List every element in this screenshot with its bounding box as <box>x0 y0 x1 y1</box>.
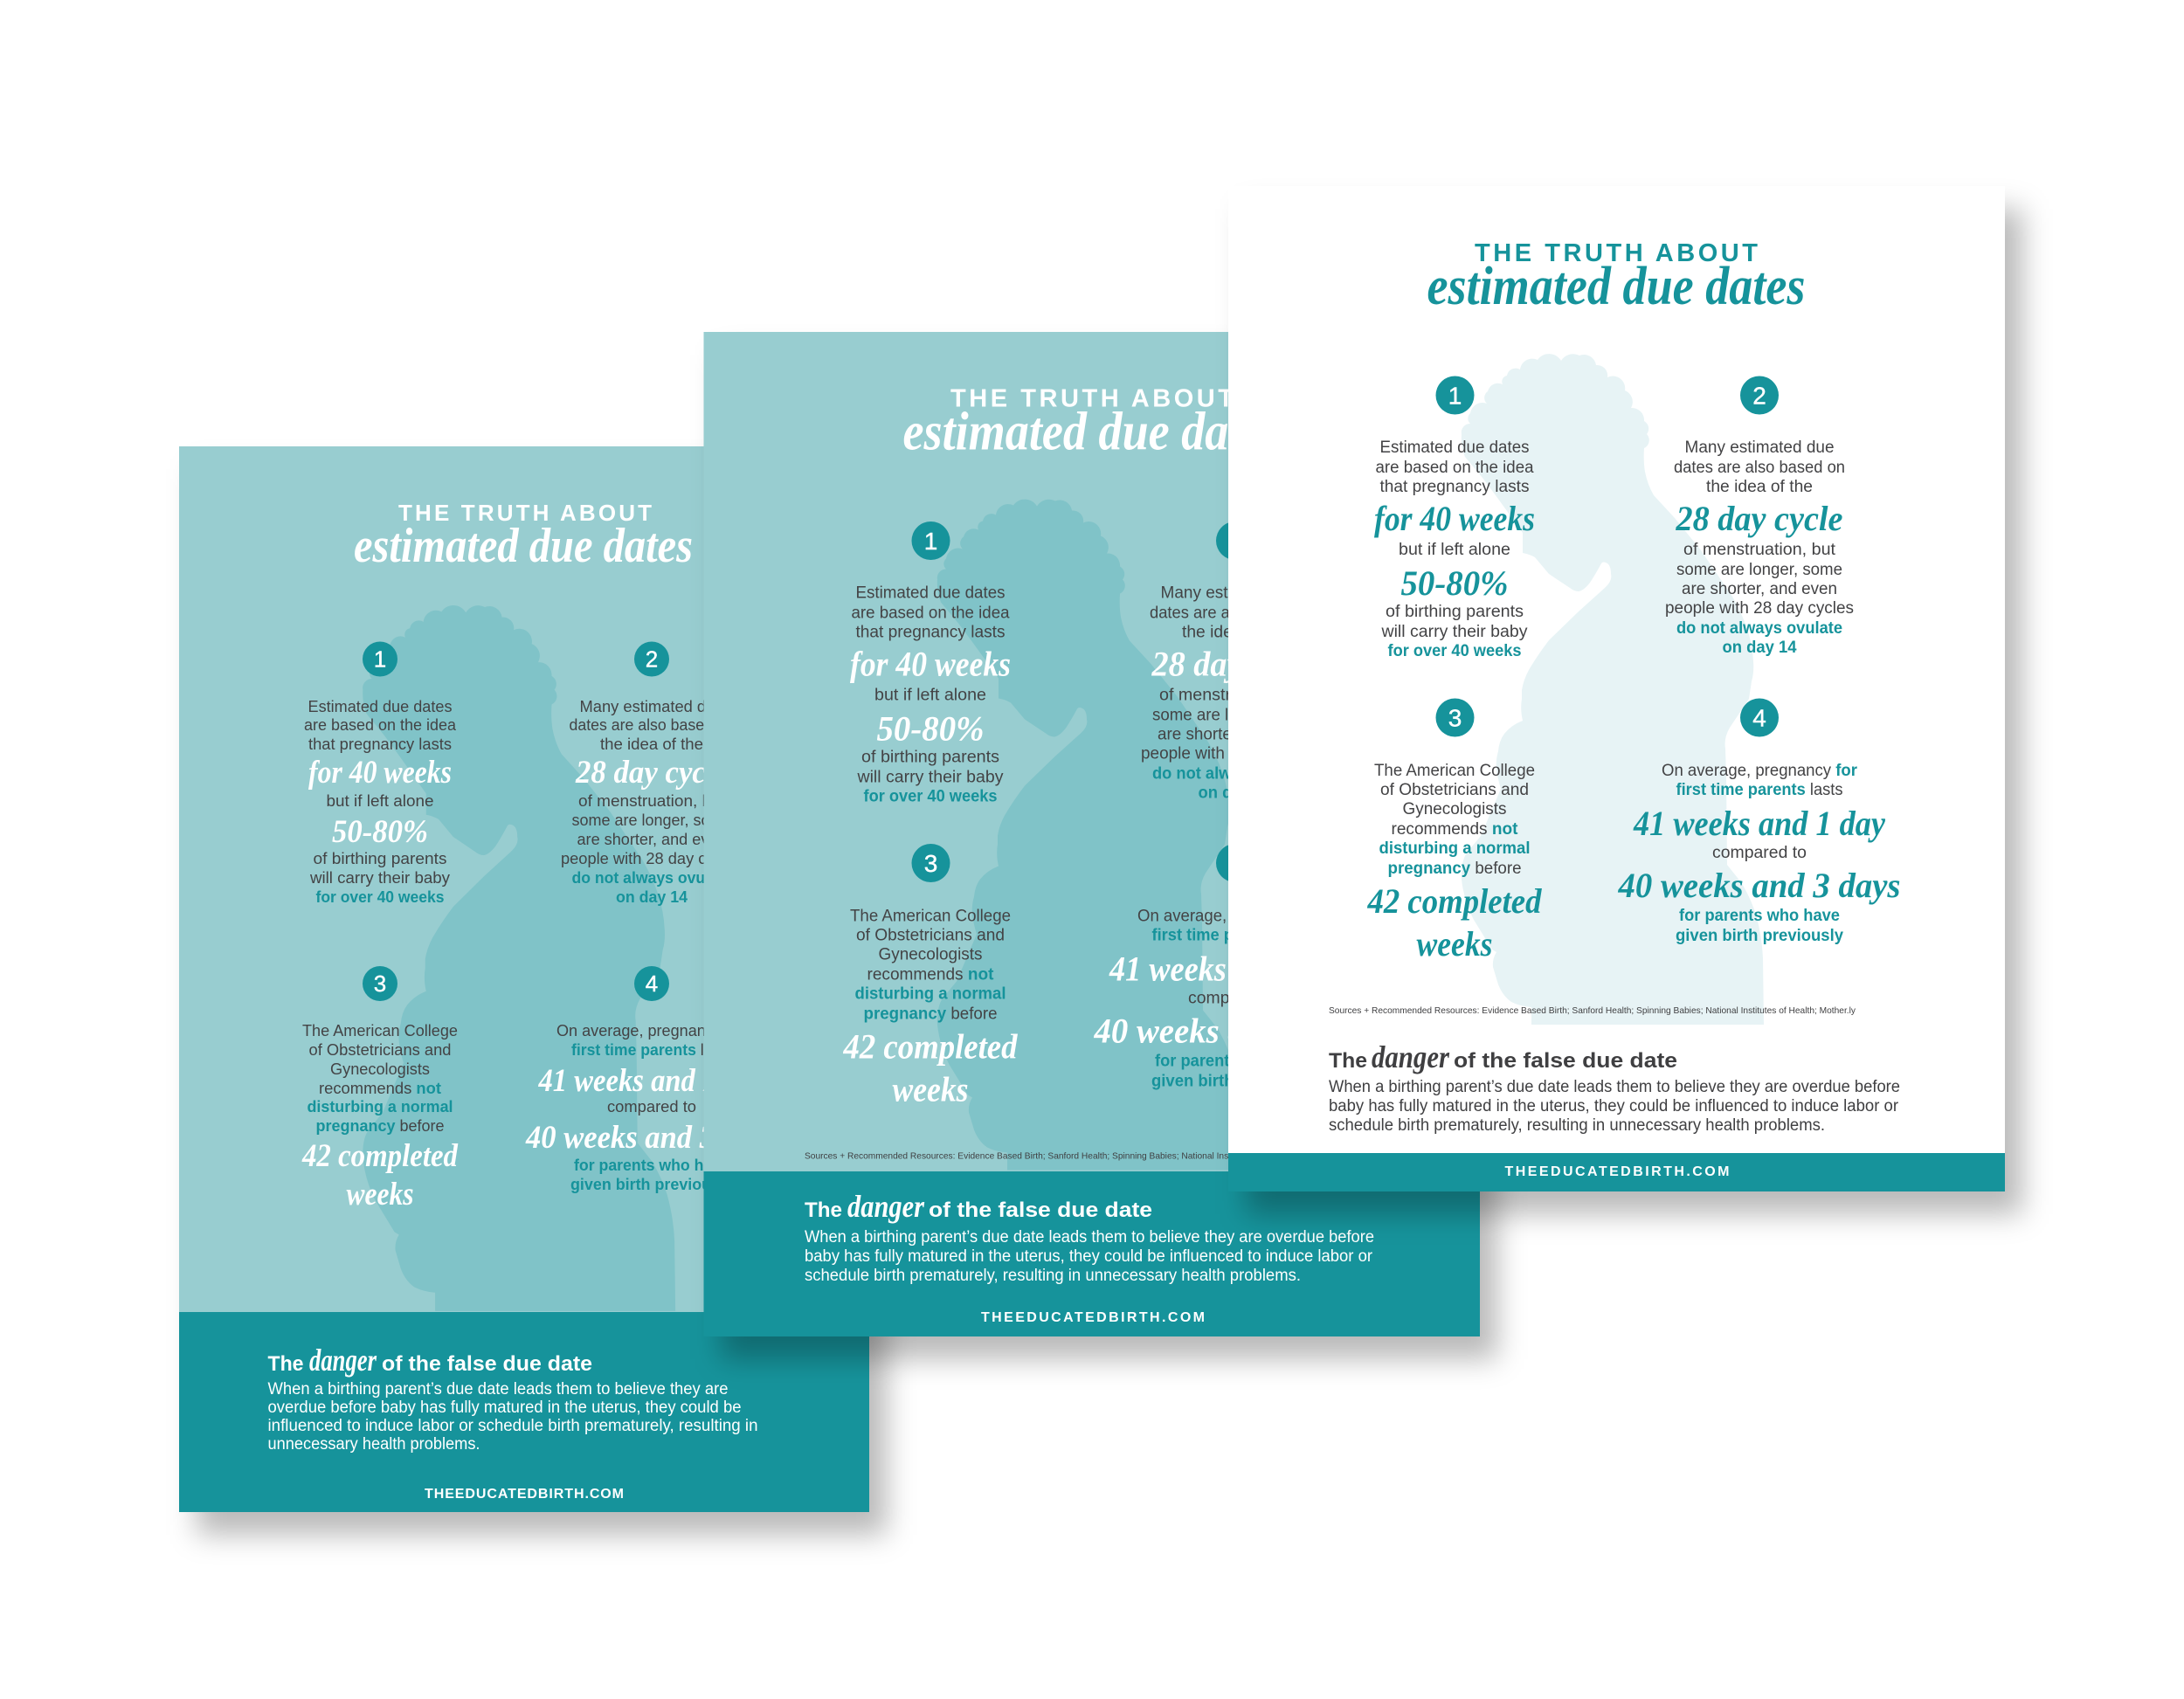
footer text, card 2: danger <box>847 1189 925 1224</box>
step 1, card 1: Estimated due dates <box>308 698 453 715</box>
footer text, card 1: influenced to induce labor or schedule birth prematurely, resulting in <box>267 1417 758 1435</box>
step 2, card 1: 2 <box>646 646 658 673</box>
step 1, card 1 <box>304 641 457 906</box>
step 3, card 3: The American College <box>1374 762 1535 780</box>
step 3, card 1: recommends not <box>319 1080 441 1097</box>
step 2, card 1: the idea of the <box>600 736 703 753</box>
step 3, card 2 <box>843 844 1018 1109</box>
step 2, card 1: of menstruation, but <box>578 792 725 810</box>
footer text, card 1: of the false due date <box>382 1352 592 1376</box>
step 3, card 2: recommends not <box>867 966 994 984</box>
step 2, card 2: people with 28 day cycles <box>1141 744 1330 763</box>
footer text, card 1: overdue before baby has fully matured in the uterus, they could be <box>267 1399 741 1417</box>
step 4, card 1: first time parents lasts <box>571 1041 732 1059</box>
step 3, card 2: disturbing a normal <box>854 985 1006 1003</box>
step 2, card 3: 28 day cycle <box>1676 499 1843 538</box>
step 4, card 1: given birth previously <box>570 1176 733 1193</box>
step 1, card 1: are based on the idea <box>304 716 457 734</box>
step 3, card 1: weeks <box>346 1177 414 1212</box>
step 1, card 1: that pregnancy lasts <box>308 736 452 753</box>
step 2, card 3: dates are also based on <box>1674 459 1845 477</box>
footer text, card 1: The <box>267 1352 304 1376</box>
footer text, card 1: When a birthing parent’s due date leads them to believe they are <box>267 1380 729 1399</box>
step 2, card 2: dates are also based on <box>1150 604 1321 622</box>
footer text, card 2: When a birthing parent’s due date leads them to believe they are overdue before <box>805 1228 1374 1247</box>
step 3, card 2: Gynecologists <box>879 945 982 964</box>
step 4, card 2: compared to <box>1188 989 1282 1008</box>
step 4, card 1 <box>525 966 778 1193</box>
step 1, card 2: 1 <box>924 528 937 555</box>
sources line, card 2: Sources + Recommended Resources: Evidence Based Birth; Sanford Health; Spinning Babies; National Institutes of Health; Mother.ly <box>805 1151 1332 1162</box>
step 1, card 3: but if left alone <box>1399 541 1510 559</box>
step 3, card 1: The American College <box>302 1022 458 1039</box>
footer band, card 2 <box>704 1171 1480 1336</box>
footer text, card 1: THEEDUCATEDBIRTH.COM <box>425 1487 624 1502</box>
heading, card 3: THE TRUTH ABOUT <box>1475 239 1758 267</box>
step 3, card 3: recommends not <box>1391 820 1518 839</box>
step 1, card 2: are based on the idea <box>851 604 1010 622</box>
step 2, card 2: the idea of the <box>1182 624 1289 641</box>
step 3, card 3: disturbing a normal <box>1379 839 1531 858</box>
step 2, card 1: dates are also based on <box>570 716 734 734</box>
step 3, card 3 <box>1367 699 1542 963</box>
footer band, card 3 <box>1228 1153 2005 1191</box>
step 1, card 2: that pregnancy lasts <box>856 624 1005 641</box>
step 4, card 3: 41 weeks and 1 day <box>1633 804 1885 843</box>
footer text, card 1: unnecessary health problems. <box>267 1435 480 1454</box>
step 4, card 2: 4 <box>1228 850 1242 877</box>
heading, card 1: estimated due dates <box>354 519 693 573</box>
step 3, card 2: pregnancy before <box>863 1005 998 1024</box>
step 1, card 2: will carry their baby <box>856 769 1004 786</box>
step 4, card 1: 40 weeks and 3 days <box>525 1120 778 1156</box>
step 2, card 3: do not always ovulate <box>1676 619 1842 638</box>
step 1, card 3: Estimated due dates <box>1380 439 1529 457</box>
danger text block, card 3: of the false due date <box>1454 1049 1677 1073</box>
danger text block, card 3: schedule birth prematurely, resulting in unnecessary health problems. <box>1329 1116 1825 1135</box>
step 4, card 2: given birth previously <box>1151 1073 1319 1090</box>
step 2, card 3: of menstruation, but <box>1683 541 1836 559</box>
step 1, card 1: for 40 weeks <box>308 755 452 791</box>
footer text, card 2: The <box>805 1198 842 1222</box>
silhouette: pregnant person, card 2 <box>937 500 1240 1171</box>
silhouette: pregnant person, card 3 <box>1462 354 1764 1025</box>
step 1, card 2: 50-80% <box>877 709 984 748</box>
step 3, card 3: Gynecologists <box>1403 800 1506 818</box>
step 1, card 2 <box>850 521 1011 805</box>
step 2, card 2: do not always ovulate <box>1152 765 1318 783</box>
footer text, card 2 <box>805 1189 1374 1325</box>
step 2, card 1: on day 14 <box>616 888 688 906</box>
step 2, card 2 <box>1141 521 1330 802</box>
card 1: teal sheet at back left <box>179 446 887 1535</box>
step 3, card 1: pregnancy before <box>316 1117 444 1135</box>
danger text block, card 3: danger <box>1372 1039 1450 1074</box>
step 2, card 1: people with 28 day cycles <box>561 850 743 867</box>
step 3, card 2: of Obstetricians and <box>856 926 1005 945</box>
step 2, card 1 <box>561 641 743 906</box>
footer text, card 2: schedule birth prematurely, resulting in unnecessary health problems. <box>805 1267 1301 1285</box>
step 1, card 1: but if left alone <box>327 792 433 810</box>
heading, card 1: THE TRUTH ABOUT <box>398 500 652 526</box>
step 3, card 1: 3 <box>374 970 386 997</box>
card 3: white sheet at front right <box>1228 186 2022 1214</box>
step 4, card 3: On average, pregnancy for <box>1662 762 1858 780</box>
step 4, card 1: On average, pregnancy for <box>556 1022 747 1039</box>
step 2, card 2: Many estimated due <box>1160 584 1310 603</box>
step 4, card 3 <box>1618 699 1901 945</box>
step 4, card 1: for parents who have <box>574 1157 729 1174</box>
website url, card 3: THEEDUCATEDBIRTH.COM <box>1504 1164 1730 1179</box>
step 2, card 1: some are longer, some <box>571 812 732 829</box>
footer text, card 2: of the false due date <box>929 1198 1152 1222</box>
step 1, card 3: will carry their baby <box>1380 623 1528 641</box>
step 2, card 1: 28 day cycle <box>575 755 728 791</box>
step 1, card 1: 50-80% <box>332 814 428 850</box>
step 1, card 2: for 40 weeks <box>850 645 1011 683</box>
step 2, card 3: 2 <box>1752 383 1766 409</box>
footer text, card 1: danger <box>309 1343 377 1378</box>
step 1, card 1: will carry their baby <box>309 869 450 887</box>
step 3, card 2: 3 <box>924 850 937 877</box>
step 2, card 1: are shorter, and even <box>577 831 727 848</box>
step 2, card 3: on day 14 <box>1723 639 1797 657</box>
step 4, card 3: given birth previously <box>1676 927 1843 945</box>
step 1, card 3: for over 40 weeks <box>1387 642 1522 660</box>
heading, card 1 <box>354 500 693 573</box>
footer text, card 2: THEEDUCATEDBIRTH.COM <box>981 1310 1205 1325</box>
heading, card 3: estimated due dates <box>1427 257 1805 316</box>
step 1, card 3: of birthing parents <box>1386 603 1524 621</box>
step 4, card 1: compared to <box>607 1098 696 1115</box>
step 2, card 3 <box>1665 376 1854 657</box>
step 3, card 3: of Obstetricians and <box>1380 781 1529 799</box>
step 1, card 1: 1 <box>374 646 386 673</box>
heading, card 3 <box>1427 239 1805 316</box>
step 4, card 2: first time parents lasts <box>1151 926 1319 945</box>
step 4, card 3: compared to <box>1712 844 1807 862</box>
silhouette: pregnant person, card 1 <box>363 605 675 1311</box>
step 4, card 2: for parents who have <box>1155 1052 1316 1071</box>
step 3, card 2: weeks <box>893 1069 968 1109</box>
step 3, card 1: disturbing a normal <box>308 1098 453 1115</box>
step 3, card 2: The American College <box>850 907 1011 926</box>
step 3, card 1: Gynecologists <box>330 1060 430 1078</box>
danger text block, card 3: When a birthing parent’s due date leads them to believe they are overdue before <box>1329 1078 1900 1096</box>
sources line, card 3: Sources + Recommended Resources: Evidence Based Birth; Sanford Health; Spinning Babies; National Institutes of Health; Mother.ly <box>1329 1005 1856 1016</box>
heading, card 2: THE TRUTH ABOUT <box>950 384 1234 412</box>
heading, card 2: estimated due dates <box>903 402 1281 461</box>
step 2, card 2: some are longer, some <box>1152 706 1318 725</box>
step 1, card 3: that pregnancy lasts <box>1380 478 1529 496</box>
step 1, card 2: of birthing parents <box>861 748 999 767</box>
step 2, card 2: are shorter, and even <box>1158 725 1313 744</box>
step 3, card 3: pregnancy before <box>1387 860 1522 878</box>
step 4, card 3: for parents who have <box>1679 907 1840 925</box>
step 4, card 3: first time parents lasts <box>1676 781 1843 799</box>
step 3, card 1: 42 completed <box>301 1138 458 1174</box>
step 3, card 1: of Obstetricians and <box>309 1041 451 1059</box>
step 2, card 3: are shorter, and even <box>1682 580 1837 598</box>
danger text block, card 3: baby has fully matured in the uterus, they could be influenced to induce labor or <box>1329 1097 1899 1115</box>
step 3, card 2: 42 completed <box>843 1027 1018 1066</box>
step 1, card 2: but if left alone <box>874 687 986 704</box>
step 4, card 2 <box>1094 844 1377 1090</box>
step 2, card 3: people with 28 day cycles <box>1665 599 1854 618</box>
step 2, card 2: 28 day cycle <box>1151 645 1319 683</box>
step 4, card 1: 41 weeks and 1 day <box>538 1063 765 1099</box>
danger text block, card 3 <box>1329 1039 1900 1135</box>
step 2, card 1: do not always ovulate <box>571 869 732 887</box>
step 4, card 2: 40 weeks and 3 days <box>1094 1012 1377 1050</box>
step 3, card 3: weeks <box>1417 924 1492 963</box>
step 1, card 3: for 40 weeks <box>1374 499 1535 538</box>
card 2 content <box>805 384 1377 1162</box>
step 4, card 3: 40 weeks and 3 days <box>1618 866 1901 905</box>
card 2: teal sheet in the middle <box>704 332 1497 1359</box>
step 1, card 1: of birthing parents <box>313 850 447 867</box>
step 4, card 2: On average, pregnancy for <box>1137 907 1334 926</box>
step 2, card 3: Many estimated due <box>1684 439 1835 457</box>
step 2, card 2: of menstruation, but <box>1159 687 1312 704</box>
step 4, card 3: 4 <box>1752 704 1766 732</box>
step 2, card 1: Many estimated due <box>580 698 723 715</box>
step 1, card 2: for over 40 weeks <box>863 788 998 805</box>
step 2, card 3: the idea of the <box>1706 478 1813 496</box>
footer text, card 2: baby has fully matured in the uterus, they could be influenced to induce labor or <box>805 1247 1373 1266</box>
step 2, card 3: some are longer, some <box>1676 561 1842 579</box>
step 4, card 2: 41 weeks and 1 day <box>1109 949 1361 989</box>
step 3, card 3: 42 completed <box>1367 881 1542 921</box>
step 2, card 2: on day 14 <box>1199 784 1273 802</box>
step 4, card 1: 4 <box>646 970 658 997</box>
step 1, card 3 <box>1374 376 1535 660</box>
heading, card 2 <box>903 384 1281 461</box>
danger text block, card 3: The <box>1329 1049 1367 1073</box>
step 1, card 3: are based on the idea <box>1375 459 1534 477</box>
step 3, card 3: 3 <box>1448 704 1462 732</box>
step 1, card 3: 50-80% <box>1401 563 1508 603</box>
step 1, card 3: 1 <box>1448 383 1462 409</box>
step 1, card 2: Estimated due dates <box>856 584 1005 603</box>
step 2, card 2: 2 <box>1228 528 1242 555</box>
step 3, card 1 <box>301 966 458 1212</box>
step 1, card 1: for over 40 weeks <box>316 888 444 906</box>
footer band, card 1 <box>179 1312 869 1512</box>
footer text, card 1 <box>267 1343 758 1502</box>
